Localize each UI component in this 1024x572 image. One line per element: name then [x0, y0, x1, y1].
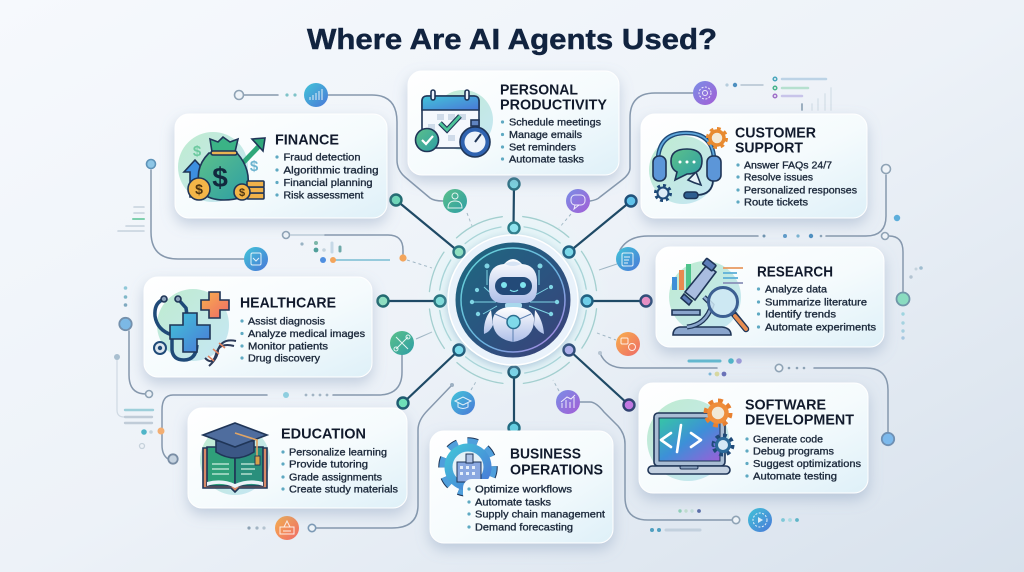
panel: finance: Algorithmic trading: [284, 164, 379, 176]
data bars: [118, 79, 831, 530]
icon: chat (satellite): [566, 189, 590, 213]
panel: software development: SOFTWARE: [745, 396, 826, 414]
icon: people (satellite): [443, 189, 467, 213]
panel: education: Personalize learning: [289, 446, 387, 458]
icon: money bag: $: [193, 143, 202, 160]
panel: healthcare: Assist diagnosis: [248, 316, 325, 328]
panel: healthcare: HEALTHCARE: [240, 294, 336, 312]
panel: research: Summarize literature: [765, 296, 867, 308]
icon: document (satellite): [616, 247, 640, 271]
panel: customer support: Resolve issues: [744, 172, 813, 184]
icon: money bag: [178, 132, 265, 202]
panel: software development: [639, 383, 868, 493]
panel: finance: Fraud detection: [284, 152, 361, 164]
panel: education: EDUCATION: [281, 426, 366, 442]
panel: education: Create study materials: [289, 484, 398, 496]
panel: finance: Financial planning: [284, 177, 373, 189]
panel: education: Provide tutoring: [289, 458, 368, 470]
panel: personal productivity: [408, 71, 619, 175]
panel: personal productivity: Manage emails: [509, 129, 582, 141]
panel: personal productivity: Schedule meetings: [509, 116, 601, 128]
panel: business operations: [430, 431, 613, 543]
icon: calendar and stopwatch: [416, 90, 493, 157]
panel: business operations: Supply chain management: [475, 508, 605, 520]
panel: customer support: Answer FAQs 24/7: [744, 160, 832, 172]
panel: research: Analyze data: [765, 284, 827, 296]
hub arcs: [429, 216, 597, 384]
panel: finance: FINANCE: [275, 132, 339, 148]
panel: research: Identify trends: [765, 308, 836, 320]
icon: stethoscope, crosses and DNA: [154, 289, 236, 366]
panel: customer support: Route tickets: [744, 196, 808, 208]
title: Where Are AI Agents Used?: [307, 24, 717, 56]
icon: factory (satellite): [275, 516, 299, 540]
dashed links from satellite icons to hub: [416, 213, 617, 391]
icon: headset: [649, 129, 726, 204]
icon: laptop and gears: [647, 399, 732, 481]
panel: research: [656, 247, 884, 347]
circuit connectors and decorations: [114, 77, 923, 532]
panel: customer support: SUPPORT: [735, 140, 803, 156]
icon: chart blocks (satellite): [616, 332, 640, 356]
panel: healthcare: [144, 277, 372, 377]
central AI robot hub: [448, 235, 578, 365]
spokes and nodes: [378, 178, 652, 434]
panel: software development: DEVELOPMENT: [745, 412, 854, 428]
small dots: [114, 83, 923, 532]
icon: money bag: $: [250, 158, 259, 175]
icon: money bag: $: [195, 181, 203, 197]
panel: business operations: Automate tasks: [475, 496, 551, 508]
icon: settings (satellite): [693, 81, 717, 105]
panel: business operations: OPERATIONS: [510, 462, 603, 478]
icon: tools (satellite): [390, 331, 414, 355]
panel: finance: Risk assessment: [284, 190, 364, 202]
panel: personal productivity: Set reminders: [509, 142, 576, 154]
icon: gear with building: [442, 441, 507, 503]
panel: software development: Debug programs: [753, 446, 834, 458]
panel: education: Grade assignments: [289, 472, 382, 484]
panel: personal productivity: PERSONAL: [500, 82, 578, 98]
icon: money bag: $: [239, 187, 245, 199]
panel: personal productivity: PRODUCTIVITY: [500, 96, 607, 114]
panel: finance: [175, 114, 387, 218]
hub glow: [415, 202, 611, 398]
icon: clipboard (satellite): [244, 247, 268, 271]
panel: business operations: BUSINESS: [510, 446, 581, 462]
icon: graduation cap (satellite): [451, 391, 475, 415]
panel: software development: Automate testing: [753, 470, 837, 482]
panel: research: RESEARCH: [757, 264, 833, 280]
panel: customer support: Personalized responses: [744, 184, 857, 196]
panel: personal productivity: Automate tasks: [509, 154, 584, 166]
panel: customer support: CUSTOMER: [735, 124, 816, 142]
panel: software development: Generate code: [753, 434, 823, 446]
rings: [234, 90, 244, 100]
panel: business operations: Demand forecasting: [475, 522, 573, 534]
panel: education: [188, 408, 407, 508]
icon: book and graduation cap: [200, 423, 270, 495]
icon: signal bars (satellite): [304, 83, 328, 107]
panel: healthcare: Monitor patients: [248, 340, 328, 352]
icon: robot: [470, 259, 559, 342]
panel: research: Automate experiments: [765, 322, 876, 334]
panel: software development: Suggest optimizations: [753, 458, 861, 470]
icon: money bag: $: [212, 162, 228, 193]
panel: customer support: [641, 114, 867, 218]
panel: business operations: Optimize workflows: [475, 484, 572, 496]
icon: play ring (satellite): [748, 508, 772, 532]
panel: healthcare: Analyze medical images: [248, 328, 365, 340]
icon: microscope and magnifier: [669, 258, 746, 335]
icon: bar chart (satellite): [556, 390, 580, 414]
panel: healthcare: Drug discovery: [248, 352, 321, 364]
